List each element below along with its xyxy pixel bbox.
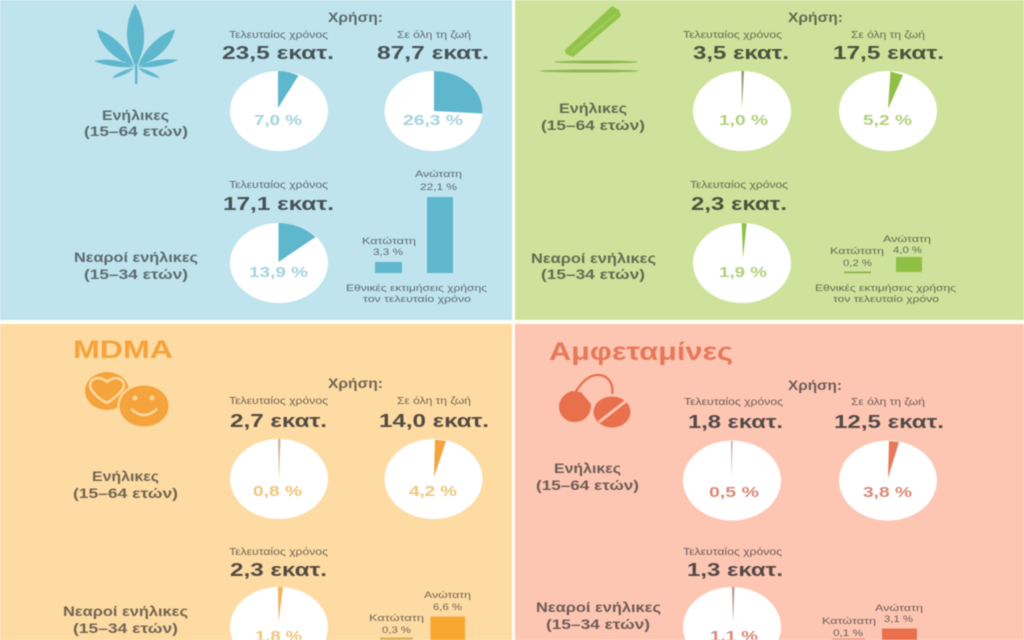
bar chart: national estimates: τον τελευταίο χρόνο <box>363 294 471 305</box>
label: young adults age group: Νεαροί ενήλικες <box>63 604 188 619</box>
icon: heart and smiley pills <box>85 372 170 428</box>
bar chart: national estimates: 3,1 % <box>884 614 914 625</box>
stat: adults lifetime: 5,2 % <box>863 112 912 129</box>
stat: adults last year: 1,0 % <box>719 112 768 129</box>
stat: adults lifetime: Σε όλη τη ζωή <box>397 395 471 407</box>
label: young adults age group <box>74 250 198 282</box>
stat: young adults last year: 2,3 εκατ. <box>691 193 787 214</box>
stat: adults lifetime: 3,8 % <box>863 484 912 501</box>
stat: young adults last year <box>690 179 791 303</box>
stat: adults last year: 0,8 % <box>253 483 302 500</box>
label: adults age group <box>73 469 178 501</box>
label: adults age group <box>536 461 639 493</box>
stat: young adults last year <box>223 179 334 303</box>
stat: young adults last year: Τελευταίος χρόνος <box>229 179 328 191</box>
panel: amphetamines <box>515 324 1024 640</box>
stat: adults lifetime: 4,2 % <box>409 483 457 500</box>
bar chart: national estimates: 3,3 % <box>373 247 404 258</box>
label: usage heading: Χρήση: <box>788 10 843 25</box>
stat: adults last year <box>683 396 783 520</box>
bar chart: national estimates: 22,1 % <box>420 182 458 193</box>
label: young adults age group: Νεαροί ενήλικες <box>531 251 656 266</box>
stat: adults last year: 1,8 εκατ. <box>688 411 783 432</box>
bar chart: national estimates: Κατώτατη <box>822 616 876 627</box>
label: young adults age group: (15–34 ετών) <box>541 267 645 282</box>
stat: young adults last year: Τελευταίος χρόνος <box>683 546 782 558</box>
stat: young adults last year: Τελευταίος χρόνος <box>229 546 328 558</box>
bar chart: national estimates: Ανώτατη <box>883 234 931 245</box>
bar chart: national estimates: Εθνικές εκτιμήσεις χρήσης <box>346 283 488 294</box>
stat: young adults last year <box>683 546 783 640</box>
stat: young adults last year: 1,3 εκατ. <box>687 559 783 580</box>
bar chart: national estimates <box>346 169 488 305</box>
bar chart: national estimates: Κατώτατη <box>362 236 416 247</box>
bar chart: national estimates: 0,1 % <box>833 628 864 639</box>
stat: young adults last year: 2,3 εκατ. <box>230 559 327 580</box>
stat: young adults last year: 1,9 % <box>719 264 767 281</box>
stat: adults last year <box>683 29 791 151</box>
panel: MDMA <box>0 324 512 640</box>
bar chart: national estimates <box>822 603 923 640</box>
stat: adults last year: 0,5 % <box>709 484 759 501</box>
stat: adults lifetime: 14,0 εκατ. <box>379 410 489 431</box>
bar chart: national estimates: Εθνικές εκτιμήσεις χρήσης <box>815 283 957 294</box>
label: young adults age group <box>63 604 188 636</box>
stat: adults lifetime <box>377 29 489 151</box>
stat: adults last year: Τελευταίος χρόνος <box>683 29 782 41</box>
stat: adults last year: 23,5 εκατ. <box>222 42 334 63</box>
label: adults age group: (15–64 ετών) <box>73 486 178 501</box>
bar chart: national estimates <box>815 234 957 305</box>
stat: young adults last year: 17,1 εκατ. <box>223 193 334 214</box>
label: usage heading: Χρήση: <box>788 378 842 393</box>
bar chart: national estimates: 0,2 % <box>843 258 873 269</box>
label: young adults age group <box>531 251 656 282</box>
label: usage heading: Χρήση: <box>328 376 383 391</box>
stat: adults last year <box>229 395 328 519</box>
label: usage heading: Χρήση: <box>328 10 383 25</box>
label: adults age group: Ενήλικες <box>102 108 169 123</box>
bar chart: national estimates: Ανώτατη <box>424 590 471 601</box>
heading: amphetamines: Αμφεταμίνες <box>549 338 733 366</box>
label: young adults age group: Νεαροί ενήλικες <box>74 250 198 265</box>
stat: adults last year: Τελευταίος χρόνος <box>229 29 328 41</box>
icon: capsule and tablet <box>559 375 630 428</box>
stat: adults last year: 2,7 εκατ. <box>230 410 327 431</box>
stat: adults last year: Τελευταίος χρόνος <box>229 395 328 407</box>
label: adults age group: (15–64 ετών) <box>84 124 188 139</box>
bar chart: national estimates: Ανώτατη <box>875 603 923 614</box>
label: adults age group: (15–64 ετών) <box>541 118 645 133</box>
stat: adults lifetime: Σε όλη τη ζωή <box>851 29 925 41</box>
label: young adults age group: Νεαροί ενήλικες <box>536 600 661 615</box>
label: young adults age group: (15–34 ετών) <box>84 267 188 282</box>
stat: young adults last year: 13,9 % <box>249 264 308 281</box>
label: young adults age group: (15–34 ετών) <box>546 617 650 632</box>
label: young adults age group <box>536 600 661 632</box>
stat: adults lifetime: 12,5 εκατ. <box>834 411 944 432</box>
stat: adults last year: 3,5 εκατ. <box>693 42 789 63</box>
bar chart: national estimates: Κατώτατη <box>830 246 884 257</box>
stat: adults lifetime: 17,5 εκατ. <box>833 42 944 63</box>
stat: adults last year: Τελευταίος χρόνος <box>684 396 783 408</box>
stat: adults last year: 7,0 % <box>254 112 302 129</box>
icon: line and straw <box>539 6 639 72</box>
stat: young adults last year <box>229 546 328 640</box>
bar chart: national estimates: 0,3 % <box>382 625 412 636</box>
bar chart: national estimates: Κατώτατη <box>369 613 424 624</box>
stat: adults lifetime <box>379 395 489 519</box>
bar chart: national estimates: 6,6 % <box>433 602 463 613</box>
bar chart: national estimates: τον τελευταίο χρόνο <box>833 294 939 305</box>
bar chart: national estimates <box>369 590 471 640</box>
stat: adults lifetime <box>833 29 944 151</box>
panel: cannabis <box>0 0 512 320</box>
label: adults age group: Ενήλικες <box>559 101 627 116</box>
label: young adults age group: (15–34 ετών) <box>73 621 178 636</box>
stat: adults lifetime: Σε όλη τη ζωή <box>397 29 471 41</box>
stat: adults last year <box>222 29 334 151</box>
heading: MDMA: MDMA <box>73 336 173 364</box>
label: adults age group: Ενήλικες <box>92 469 159 484</box>
icon: cannabis leaf <box>94 4 178 84</box>
stat: young adults last year: Τελευταίος χρόνος <box>690 179 788 191</box>
bar chart: national estimates: Ανώτατη <box>415 169 462 180</box>
stat: adults lifetime: Σε όλη τη ζωή <box>851 396 925 408</box>
stat: adults lifetime <box>834 396 944 520</box>
stat: adults lifetime: 26,3 % <box>403 112 463 129</box>
label: adults age group <box>84 108 188 139</box>
label: adults age group: Ενήλικες <box>554 461 621 476</box>
panel: cocaine <box>515 0 1024 320</box>
stat: adults lifetime: 87,7 εκατ. <box>377 42 489 63</box>
label: adults age group <box>541 101 645 133</box>
label: adults age group: (15–64 ετών) <box>536 478 639 493</box>
bar chart: national estimates: 4,0 % <box>893 245 923 256</box>
